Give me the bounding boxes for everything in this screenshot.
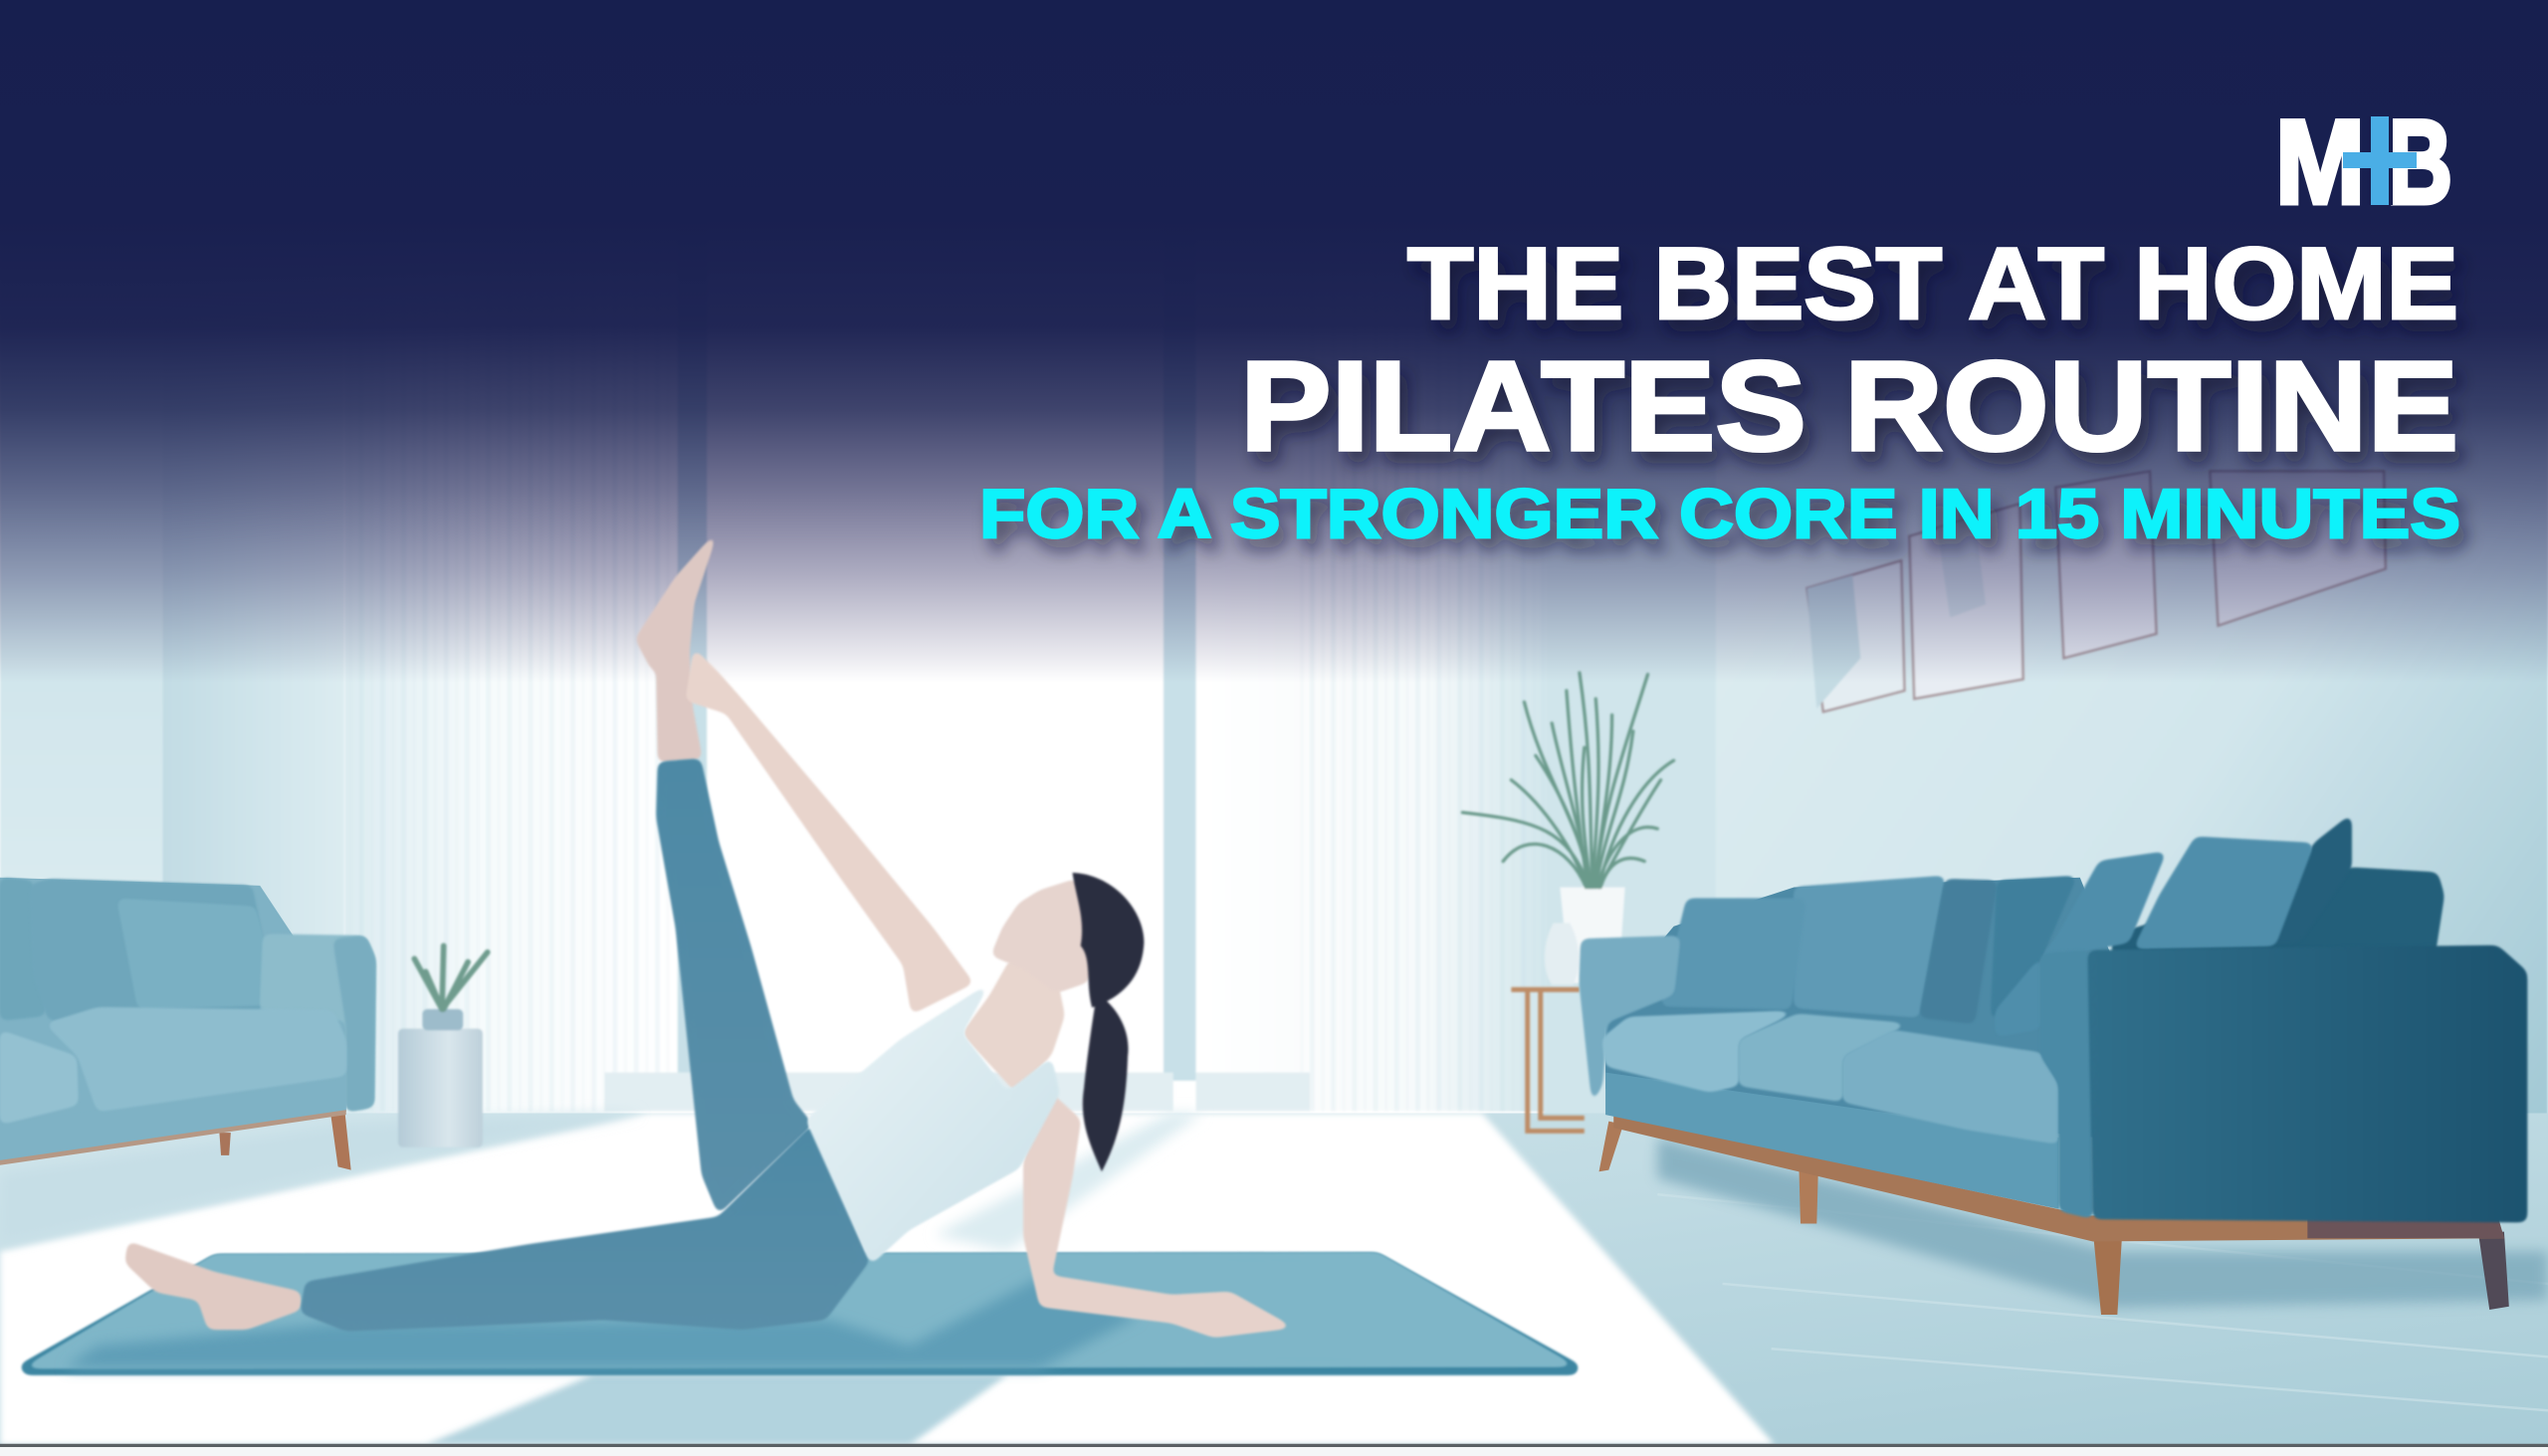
left sofa: [0, 878, 375, 1170]
right sofa: [1580, 814, 2548, 1315]
chest and neck: [962, 958, 1064, 1092]
tank top: [806, 983, 1059, 1264]
sofa backing: [1605, 878, 2112, 1138]
bottom edge line: [0, 1444, 2548, 1447]
raised foot and calf: [635, 529, 719, 762]
window and curtains: [344, 0, 1547, 1122]
support arm: [1024, 1091, 1294, 1338]
raised leg legging: [657, 759, 812, 1214]
hair and ponytail: [1073, 873, 1144, 1171]
logo: M: [2275, 96, 2365, 229]
face: [991, 879, 1095, 993]
logo: [2275, 96, 2452, 229]
hips and lower leg legging: [301, 1125, 869, 1331]
raised arm: [686, 648, 973, 1014]
side table, vase and tall plant: [1462, 673, 1674, 1131]
woman doing pilates pose: [125, 529, 1294, 1338]
wall pictures: [1807, 472, 2386, 712]
title line 1: THE BEST AT HOME: [1407, 227, 2458, 340]
pedestal with small plant: [398, 945, 488, 1147]
title line 2: PILATES ROUTINE: [1240, 335, 2458, 478]
yoga mat: [20, 1253, 1580, 1374]
navy gradient overlay: [0, 0, 2548, 683]
subtitle: FOR A STRONGER CORE IN 15 MINUTES: [979, 475, 2460, 552]
resting foot: [125, 1241, 301, 1330]
floor: [0, 1113, 2548, 1446]
logo: B: [2387, 96, 2452, 229]
